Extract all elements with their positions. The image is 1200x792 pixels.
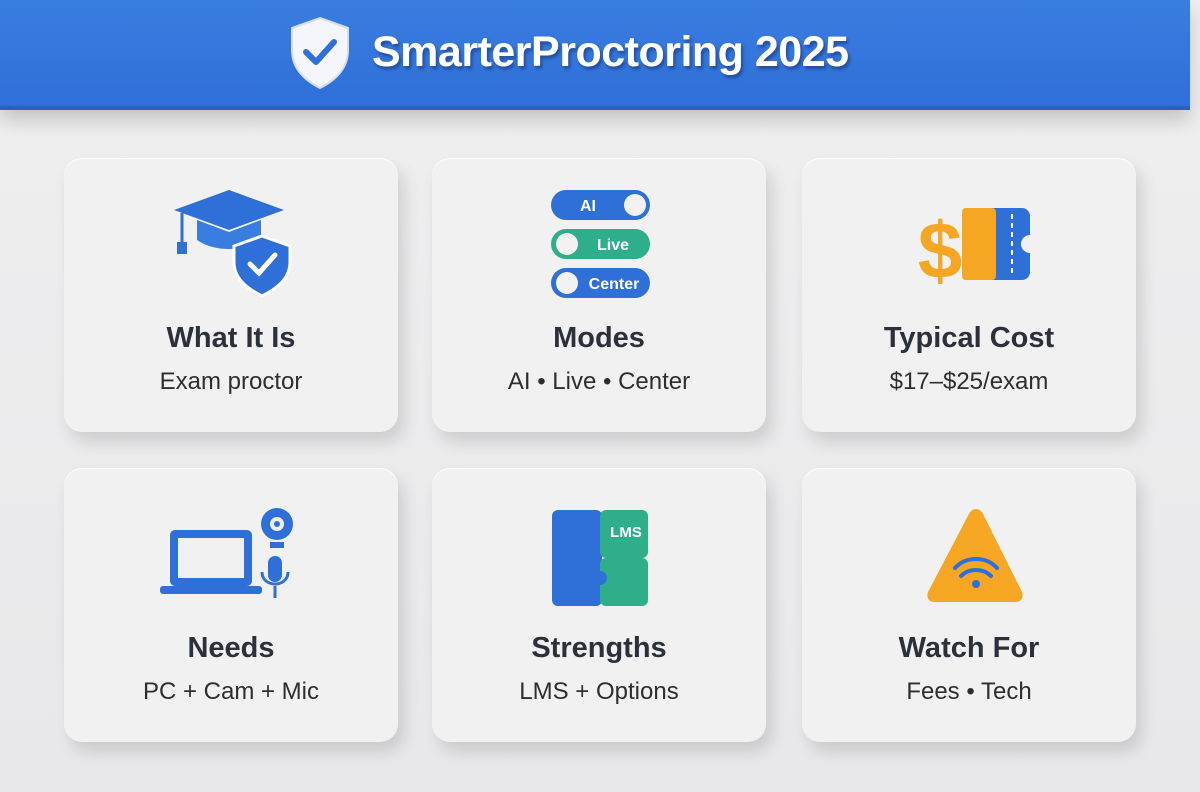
title: SmarterProctoring 2025 — [372, 28, 849, 76]
icon: toggles: Live — [597, 237, 629, 254]
icon: toggles: AI — [580, 198, 596, 215]
panel: needs: PC + Cam + Mic — [143, 678, 319, 705]
panel: what it is — [64, 158, 398, 432]
icon: dollar ticket: $ — [918, 206, 962, 295]
panel: modes: AI • Live • Center — [508, 368, 690, 395]
panel: typical cost: $17–$25/exam — [890, 368, 1048, 395]
panel: strengths — [432, 468, 766, 742]
icon: toggles: Center — [589, 276, 639, 293]
icon: dollar ticket — [918, 206, 1030, 295]
icon: puzzle LMS — [552, 510, 648, 606]
panel: needs: Needs — [187, 632, 275, 664]
panel: typical cost — [802, 158, 1136, 432]
icon: puzzle LMS: LMS — [610, 524, 642, 541]
panel: watch for — [802, 468, 1136, 742]
panel: modes: Modes — [553, 322, 645, 354]
icon: laptop cam mic — [160, 508, 293, 598]
panel: strengths: Strengths — [531, 632, 667, 664]
panel: what it is: What It Is — [167, 322, 295, 354]
header bar — [0, 0, 1190, 110]
icon: warning wifi — [927, 509, 1023, 602]
panel: modes — [432, 158, 766, 432]
icon: toggles — [551, 190, 650, 298]
icon: graduation cap with shield — [174, 190, 292, 298]
panel: needs — [64, 468, 398, 742]
panel: typical cost: Typical Cost — [884, 322, 1054, 354]
panel: watch for: Fees • Tech — [906, 678, 1032, 705]
panel: strengths: LMS + Options — [519, 678, 679, 705]
panel: what it is: Exam proctor — [160, 368, 302, 395]
icon: shield — [291, 17, 349, 90]
panel: watch for: Watch For — [899, 632, 1039, 664]
